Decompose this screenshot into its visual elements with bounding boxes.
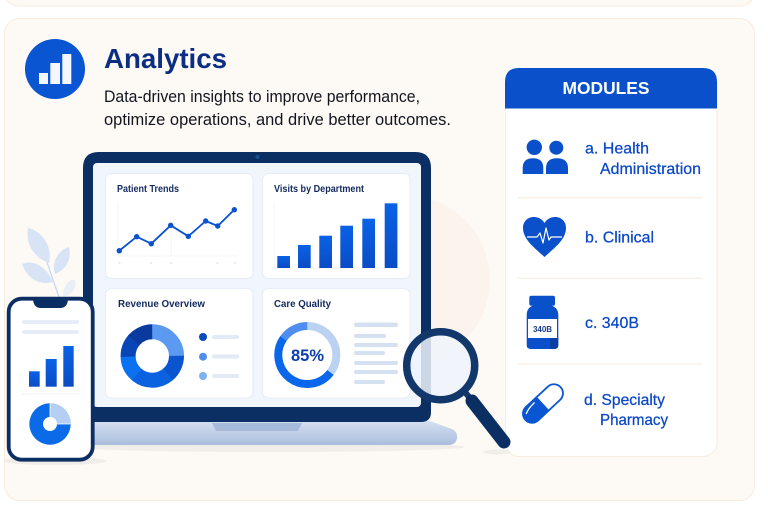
modules header <box>505 68 717 108</box>
icon: bottle: 340B <box>533 325 552 334</box>
modules heading: MODULES <box>562 78 650 98</box>
panel: patient trends: Patient Trends <box>117 183 179 195</box>
gauge ring <box>267 314 348 396</box>
panel: visits by department <box>262 174 410 278</box>
text block: description: Data-driven insights to improve performance, <box>104 87 420 106</box>
donut chart <box>118 322 187 390</box>
icon: bottle <box>527 296 558 349</box>
laptop camera <box>256 155 260 159</box>
icon: analytics badge <box>25 39 85 99</box>
panel: visits by department: Visits by Department <box>274 183 364 195</box>
background circle <box>320 195 490 365</box>
panel: revenue overview: Revenue Overview <box>118 298 206 310</box>
gauge value: 85% <box>291 347 324 365</box>
module a label: a. Health <box>585 140 649 157</box>
module d label: d. Specialty <box>584 392 665 409</box>
module d label <box>584 392 668 429</box>
icon: people <box>523 140 568 174</box>
panel: care quality: Care Quality <box>274 298 331 310</box>
phone text lines <box>22 320 79 324</box>
module b label: b. Clinical <box>585 230 654 246</box>
phone shadow <box>3 457 107 465</box>
laptop <box>83 152 431 422</box>
phone notch <box>33 298 68 308</box>
phone bar chart <box>29 346 74 387</box>
icon: heart <box>523 217 566 257</box>
panel: patient trends <box>106 174 253 278</box>
icon: magnifying glass <box>407 332 504 442</box>
laptop frame <box>83 152 431 422</box>
module d label: Pharmacy <box>600 412 668 429</box>
module a label <box>585 140 701 178</box>
panel: modules <box>505 68 717 456</box>
panel: revenue overview <box>106 288 253 398</box>
module a label: Administration <box>600 161 701 178</box>
icon: pill <box>522 383 564 424</box>
title: Analytics <box>104 43 227 74</box>
phone pie chart <box>29 403 71 445</box>
icon: decorative plant <box>22 228 75 297</box>
magnifier shadow <box>483 450 511 454</box>
module c label: c. 340B <box>585 315 639 332</box>
phone <box>9 298 93 460</box>
laptop screen <box>93 163 421 407</box>
text block: description: optimize operations, and drive better outcomes. <box>104 110 451 129</box>
laptop shadow <box>75 442 465 452</box>
panel: care quality <box>262 288 410 398</box>
text block: description <box>104 87 451 129</box>
laptop base <box>70 421 457 445</box>
legend <box>199 333 239 380</box>
text placeholder lines <box>354 322 398 384</box>
panel: previous card edge <box>4 0 754 6</box>
